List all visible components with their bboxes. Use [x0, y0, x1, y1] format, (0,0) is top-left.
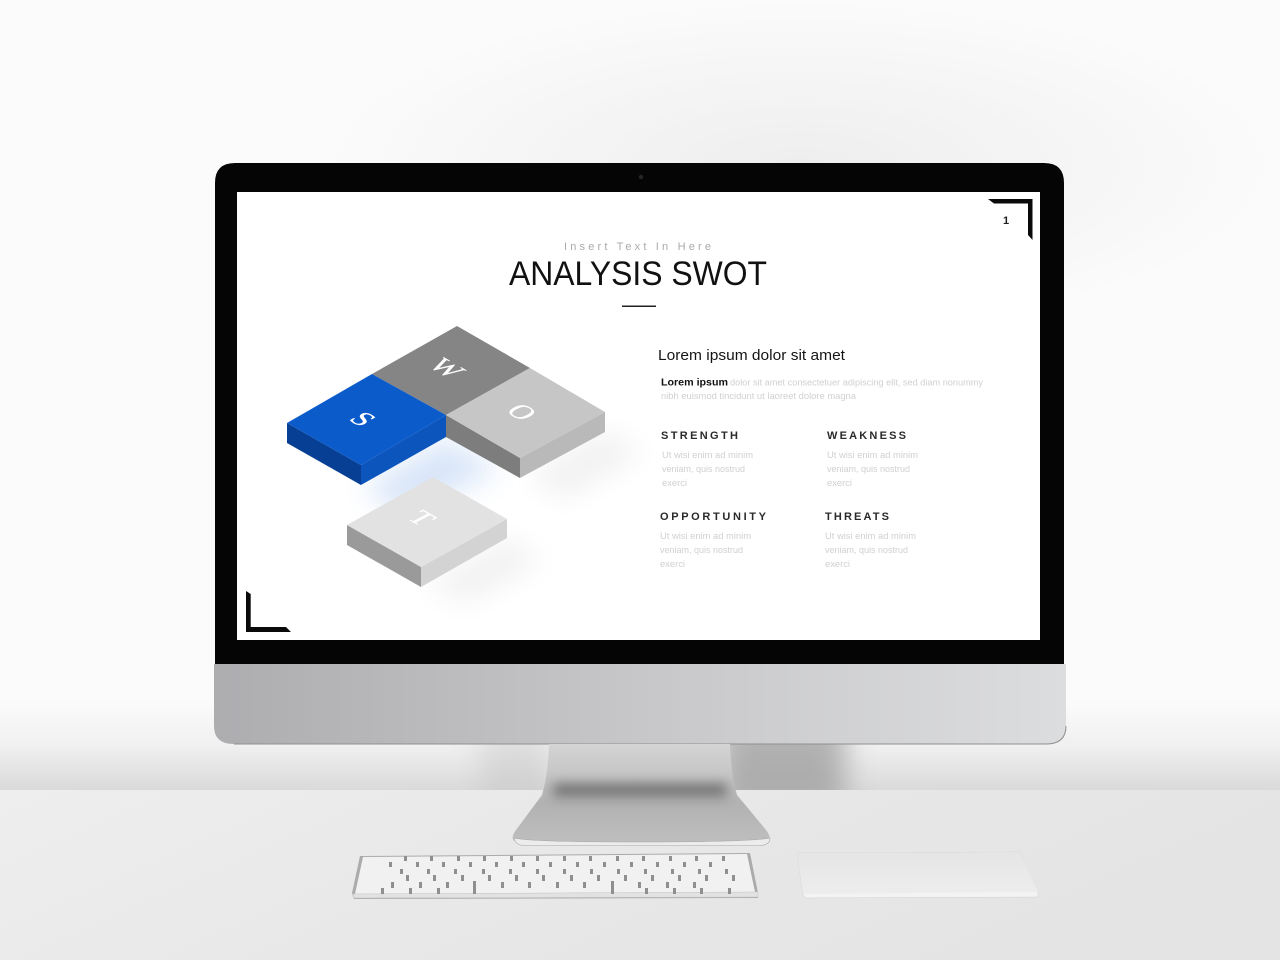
block: threats: Ut wisi enim ad minim: [825, 531, 916, 541]
wall shading near desk: [0, 700, 1280, 790]
block: weakness: veniam, quis nostrud: [827, 464, 910, 474]
tile W: [372, 326, 530, 415]
monitor bezel: [215, 163, 1064, 664]
block: opportunity: exerci: [660, 559, 685, 569]
tile S: S: [342, 408, 383, 431]
trackpad: [797, 852, 1038, 898]
title: ANALYSIS SWOT: [509, 255, 767, 293]
block: opportunity: veniam, quis nostrud: [660, 545, 743, 555]
block: weakness: [827, 430, 918, 488]
block: weakness: WEAKNESS: [827, 430, 906, 442]
tile T: [347, 477, 507, 587]
block: opportunity: OPPORTUNITY: [660, 511, 767, 523]
stand base lip: [514, 838, 770, 846]
tile T: T: [400, 507, 442, 530]
shadow: tile T: [425, 538, 545, 605]
block: strength: exerci: [662, 478, 687, 488]
stand shadow band: [553, 784, 727, 796]
intro paragraph: [661, 376, 984, 401]
shadow: tile O: [525, 430, 645, 500]
intro paragraph: dolor sit amet consectetuer adipiscing elit, sed diam nonummy: [730, 378, 984, 388]
SWOT isometric diagram: [287, 326, 645, 605]
desk surface: [0, 790, 1280, 960]
monitor stand: [513, 744, 770, 843]
subtitle: Insert Text In Here: [564, 241, 711, 253]
block: strength: STRENGTH: [661, 430, 738, 442]
bottom left corner bracket: [246, 591, 291, 632]
block: strength: Ut wisi enim ad minim: [662, 450, 753, 460]
shadow: blue glow: [365, 438, 500, 515]
keyboard: [352, 853, 758, 899]
monitor chin: [214, 664, 1066, 744]
tile O: O: [499, 400, 544, 425]
tile W: W: [421, 355, 472, 382]
tile S: [287, 374, 446, 485]
title divider: [622, 306, 656, 307]
chin bottom edge: [234, 726, 1066, 744]
intro heading: Lorem ipsum dolor sit amet: [658, 347, 846, 364]
monitor: [214, 163, 1066, 846]
block: strength: [661, 430, 753, 488]
page number: 1: [1003, 215, 1009, 227]
block: opportunity: [660, 511, 767, 569]
block: opportunity: Ut wisi enim ad minim: [660, 531, 751, 541]
block: threats: veniam, quis nostrud: [825, 545, 908, 555]
block: weakness: exerci: [827, 478, 852, 488]
block: weakness: Ut wisi enim ad minim: [827, 450, 918, 460]
top right corner bracket: [988, 199, 1032, 240]
block: strength: veniam, quis nostrud: [662, 464, 745, 474]
block: threats: [825, 511, 916, 569]
soft gray patch above monitor: [320, 0, 1280, 330]
intro paragraph: nibh euismod tincidunt ut laoreet dolore magna: [661, 391, 856, 401]
wall shadow beside stand: [479, 744, 860, 790]
tile O: [446, 368, 605, 478]
slide screen: [237, 192, 1040, 640]
block: threats: THREATS: [825, 511, 889, 523]
intro paragraph: Lorem ipsum: [661, 376, 728, 388]
camera: [639, 175, 643, 179]
block: threats: exerci: [825, 559, 850, 569]
